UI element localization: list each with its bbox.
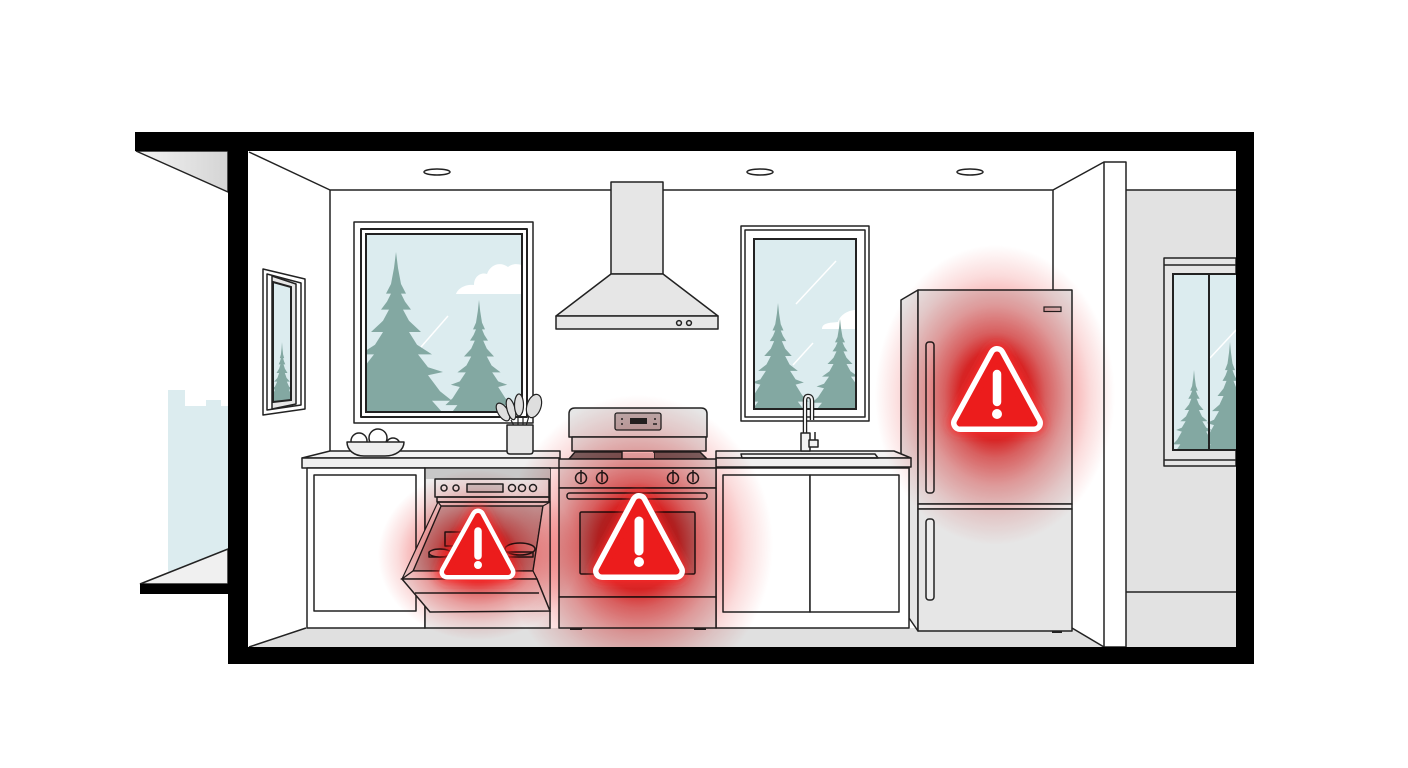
backguard bbox=[569, 408, 707, 437]
burners bbox=[569, 452, 707, 459]
heat glow: refrigerator bbox=[875, 245, 1115, 545]
adjacent room wall bbox=[1126, 190, 1236, 647]
fruit bowl bbox=[347, 429, 404, 456]
room perspective lines bbox=[249, 152, 1104, 647]
structural frame bbox=[135, 132, 1254, 664]
knob panel bbox=[559, 468, 716, 488]
badge bbox=[1044, 307, 1061, 312]
warning icon: refrigerator bbox=[960, 355, 1034, 423]
range hood bbox=[556, 182, 718, 329]
heat glow: oven bbox=[517, 402, 766, 647]
wall picture window on left wall bbox=[263, 269, 305, 415]
right cabinets bbox=[716, 468, 909, 628]
heat glow: dishwasher bbox=[383, 475, 569, 636]
faucet bbox=[801, 396, 818, 451]
open door bbox=[402, 502, 550, 612]
refrigerator bbox=[901, 290, 1104, 647]
drawer bbox=[559, 597, 716, 628]
right window bbox=[1163, 257, 1236, 467]
large window with trees bbox=[340, 222, 533, 423]
kitchen cross-section illustration bbox=[135, 132, 1254, 664]
dishwasher bbox=[402, 468, 550, 628]
utensil holder bbox=[493, 392, 544, 454]
window above sink bbox=[741, 226, 869, 421]
clock panel bbox=[615, 413, 661, 430]
lower handle bbox=[926, 519, 934, 600]
exterior left: floor wedge bbox=[140, 549, 230, 594]
exterior left: skyline bbox=[168, 390, 228, 572]
dishes bbox=[429, 532, 535, 557]
control panel bbox=[435, 479, 549, 502]
warning icon: oven bbox=[602, 502, 676, 571]
oven door bbox=[559, 488, 716, 597]
floor bbox=[249, 628, 1104, 647]
countertop left bbox=[302, 451, 560, 468]
warning icon: dishwasher bbox=[447, 516, 508, 572]
cloud bbox=[456, 264, 522, 294]
ceiling lights bbox=[424, 169, 983, 175]
countertop right with sink bbox=[716, 451, 911, 467]
stove bbox=[559, 408, 716, 629]
upper handle bbox=[926, 342, 934, 493]
left cabinet bbox=[307, 468, 425, 628]
pillar bbox=[1104, 162, 1126, 647]
exterior left: ceiling wedge bbox=[136, 151, 228, 192]
